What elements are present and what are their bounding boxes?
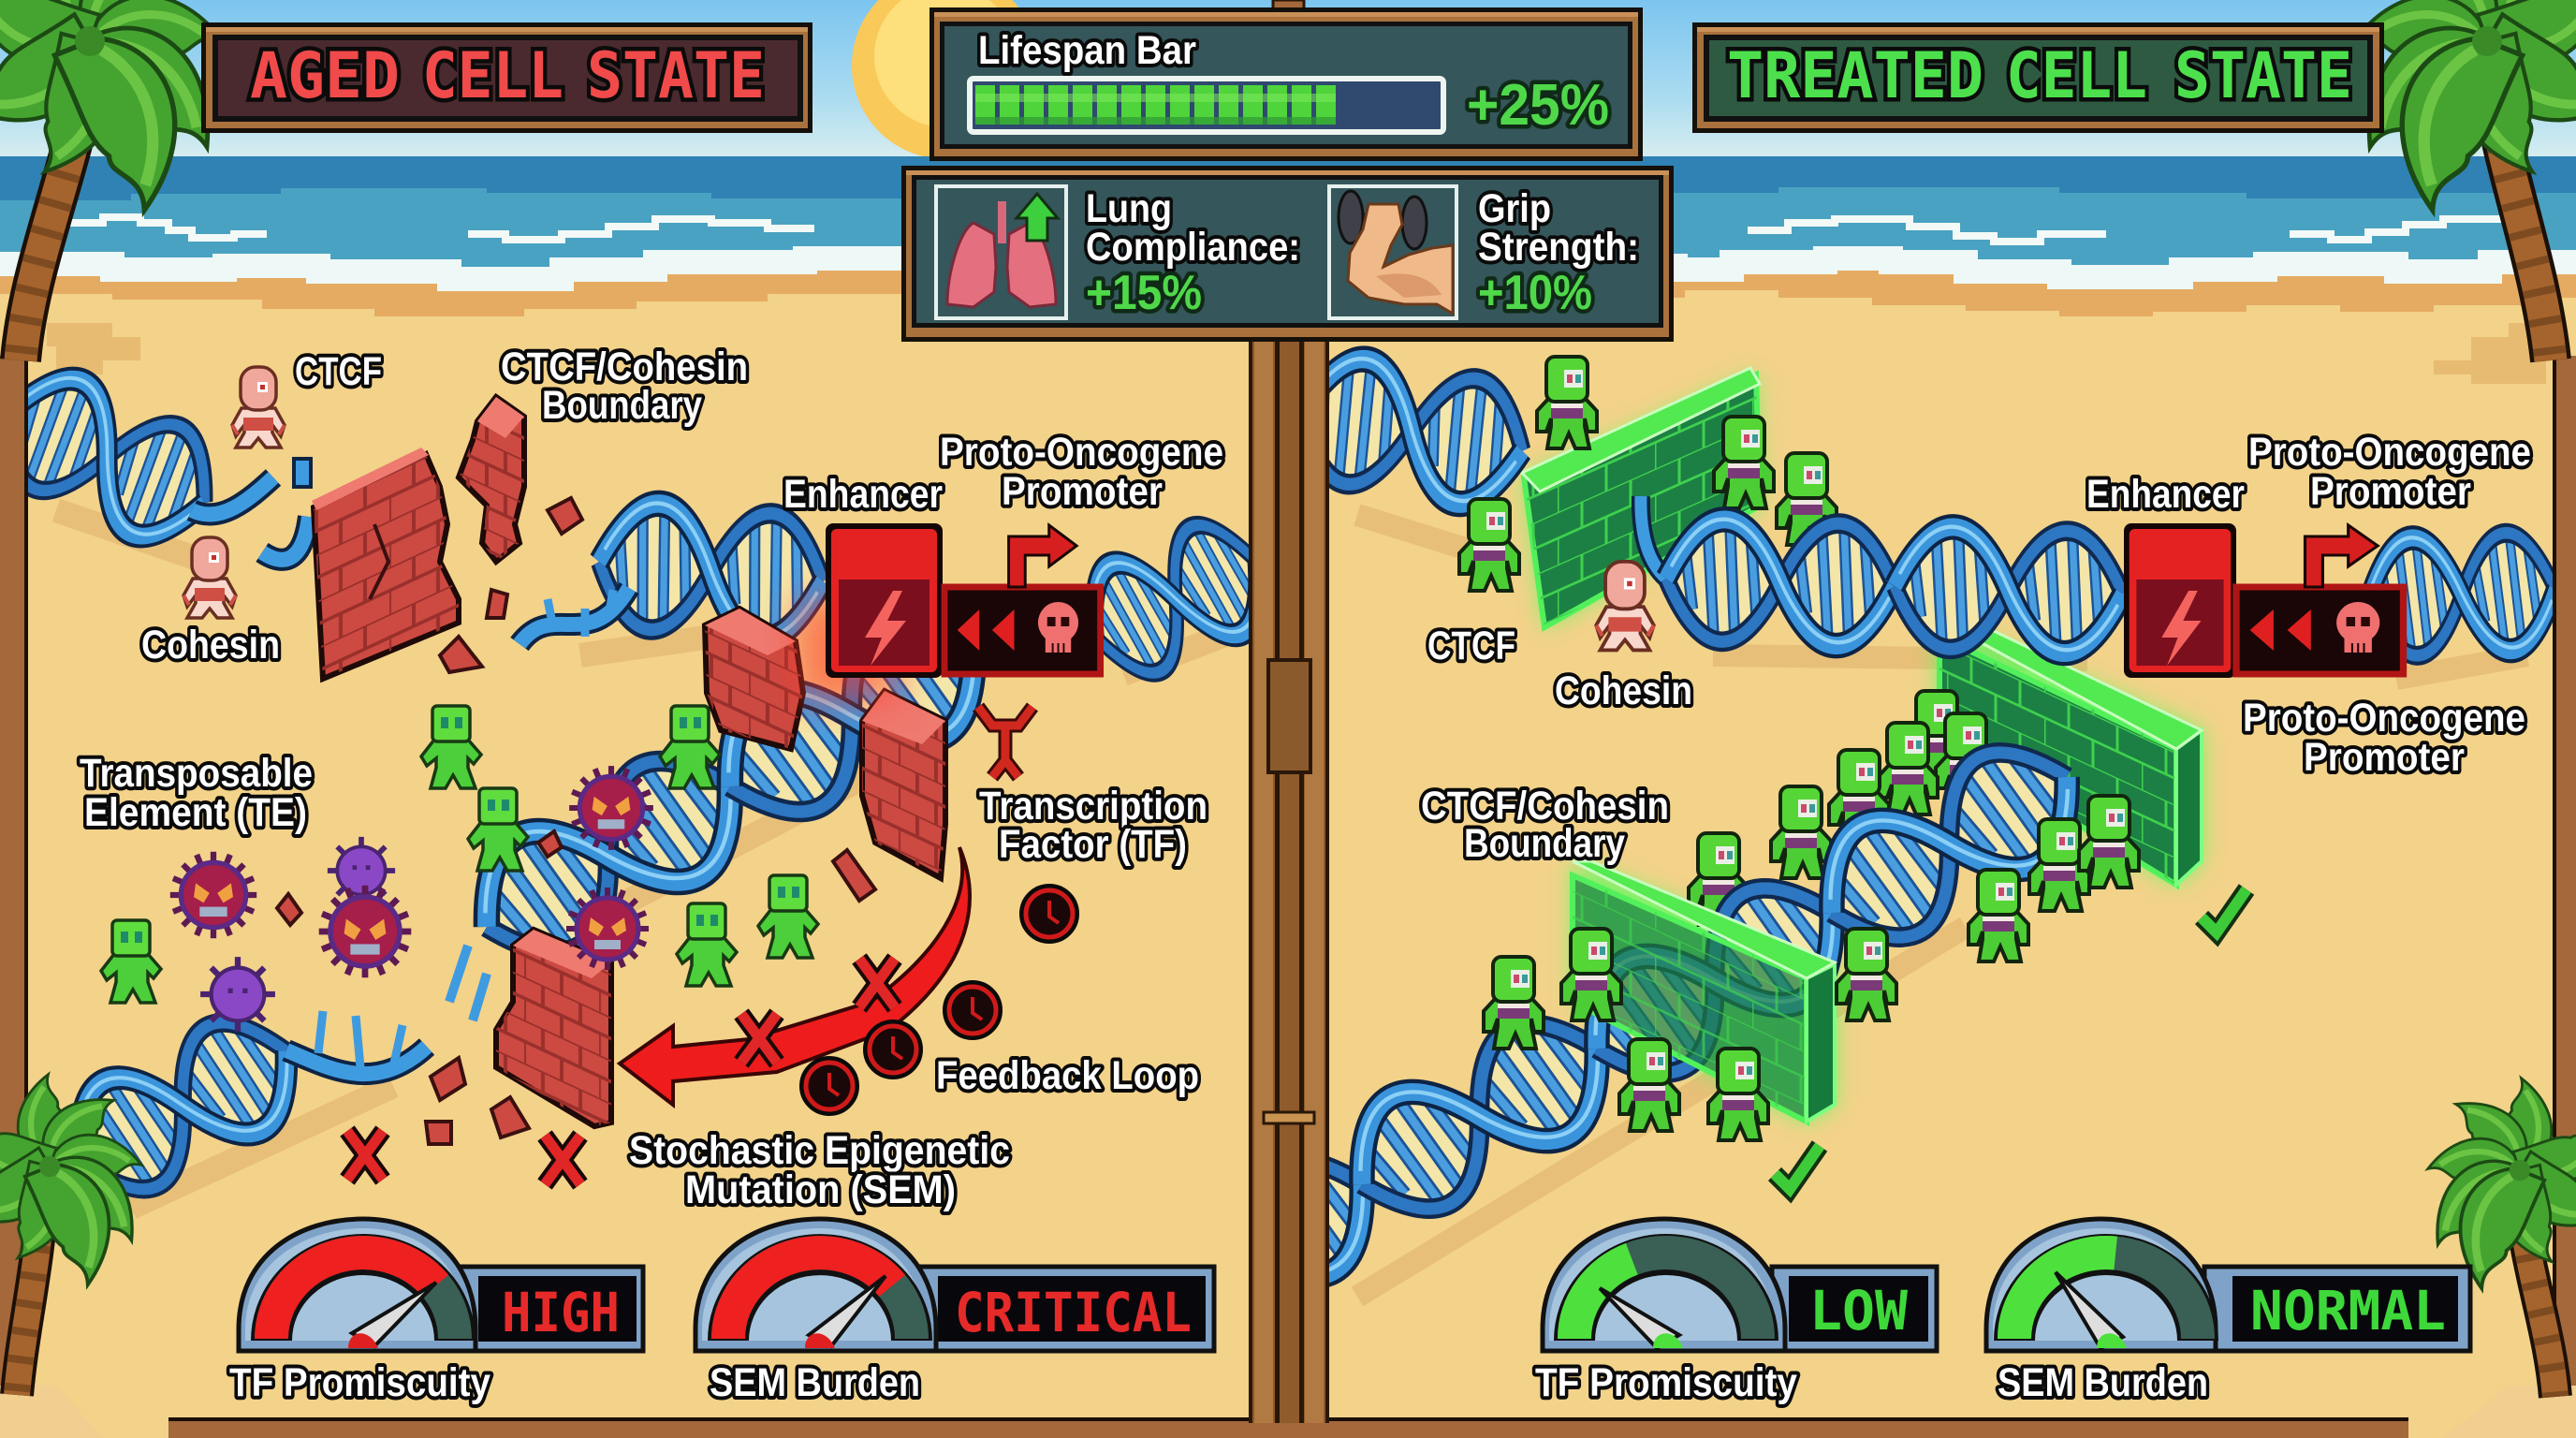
- wall: right green boundary glow: [1936, 618, 2202, 885]
- DNA: lower diagonal strand: [1096, 724, 2098, 1373]
- clock icons: [802, 887, 1076, 1113]
- label: Proto-Oncogene Promoter, lower: [2243, 696, 2525, 780]
- labels: aged scene: [80, 345, 1223, 1405]
- brick debris: [277, 498, 875, 1144]
- wall: lower green boundary, semi-transparent over DNA: [1573, 861, 1835, 1122]
- label: Proto-Oncogene Promoter: [940, 430, 1223, 514]
- free transcription factors: [101, 706, 818, 1003]
- label: CTCF/Cohesin Boundary: Boundary: [1464, 821, 1625, 866]
- text: grip strength: [1478, 186, 1639, 320]
- DNA: right of promoter: [2365, 530, 2558, 658]
- enhancer block: [826, 523, 943, 678]
- text: grip strength: Grip: [1478, 186, 1551, 231]
- gauge: aged TF promiscuity: HIGH: [502, 1281, 620, 1344]
- title board: treated cell state: TREATED: [1727, 39, 1983, 113]
- title board: aged cell state: [201, 22, 812, 133]
- text: grip strength: Strength:: [1478, 225, 1639, 270]
- label: Transcription Factor: [979, 784, 1208, 867]
- wall: lower green boundary glow: [1573, 861, 1835, 1122]
- wall: broken pillar: [459, 397, 524, 562]
- label: Enhancer: Enhancer: [2086, 472, 2245, 517]
- label: Proto-Oncogene Promoter, lower: Promoter: [2304, 735, 2465, 780]
- gauge: treated TF promiscuity: LOW: [1809, 1279, 1908, 1343]
- DNA: upper left broken strand: [0, 359, 311, 560]
- title board: treated cell state: STATE: [2174, 39, 2352, 113]
- title board: treated cell state: [1692, 22, 2384, 133]
- DNA: central strand: [455, 591, 1005, 981]
- label: CTCF/Cohesin Boundary: [501, 345, 748, 428]
- DNA: upper left strand: [1290, 349, 1533, 513]
- label: lifespan bar: Lifespan Bar: [978, 28, 1196, 73]
- Cohesin figure: [1596, 562, 1654, 650]
- palm tree: top right: [2334, 0, 2576, 360]
- enhancer glow: [796, 599, 899, 702]
- wall: right green boundary: [1936, 613, 2202, 885]
- gauge: aged TF promiscuity: [239, 1219, 643, 1351]
- label: Stochastic Epigenetic Mutation: [629, 1128, 1010, 1212]
- sand shadows under DNA: [1357, 515, 2527, 1297]
- green figures behind DNA: [1537, 357, 1996, 925]
- label: Transposable Element: Element (TE): [84, 790, 307, 835]
- icon: flexed arm with dumbbell: [1329, 186, 1456, 318]
- gauge: treated SEM burden: NORMAL: [2250, 1279, 2446, 1343]
- wall: upper green boundary: [1522, 368, 1760, 627]
- panel: lifespan bar: [929, 7, 1643, 161]
- label: CTCF/Cohesin Boundary: CTCF/Cohesin: [1421, 784, 1669, 829]
- value: plus 25 percent: +25%: [1467, 73, 1609, 138]
- label: Cohesin: Cohesin: [1555, 668, 1692, 713]
- icon: sun: [852, 0, 1039, 159]
- label: Proto-Oncogene Promoter: Promoter: [1002, 469, 1163, 514]
- label: Transposable Element: Transposable: [80, 751, 313, 796]
- DNA: right of promoter: [1070, 507, 1281, 690]
- title board: treated cell state: CELL: [2006, 39, 2147, 113]
- Cohesin figure: [183, 537, 236, 618]
- label: TF Promiscuity: TF Promiscuity: [229, 1360, 490, 1405]
- CTCF figure: [232, 367, 285, 448]
- red X marks: [347, 959, 895, 1184]
- DNA: middle left broken strand: [520, 499, 828, 644]
- label: Proto-Oncogene Promoter: Proto-Oncogene: [940, 430, 1223, 475]
- labels: treated scene: [1421, 430, 2531, 1405]
- label: CTCF: CTCF: [295, 349, 382, 394]
- text: lung compliance: Lung: [1086, 186, 1172, 231]
- title board: aged cell state: CELL: [422, 39, 564, 113]
- green figures in front of DNA: [1459, 499, 2139, 1140]
- title board: aged cell state: STATE: [587, 39, 765, 113]
- text: lung compliance: Compliance:: [1086, 225, 1300, 270]
- label: CTCF/Cohesin Boundary: CTCF/Cohesin: [501, 345, 748, 389]
- enhancer block: [2124, 523, 2236, 678]
- gauge: treated TF promiscuity: [1543, 1219, 1937, 1351]
- promoter with silencing arrows: [944, 525, 1101, 674]
- label: TF Promiscuity: TF Promiscuity: [1535, 1360, 1797, 1405]
- wall: lower brick wall: [496, 930, 611, 1126]
- label: Proto-Oncogene Promoter, top: Promoter: [2310, 469, 2471, 514]
- gauge: treated SEM burden: [1986, 1219, 2470, 1351]
- sand shadows under DNA: [56, 510, 1245, 1208]
- label: SEM Burden: SEM Burden: [1998, 1360, 2208, 1405]
- label: Transposable Element: [80, 751, 313, 835]
- promoter with silencing arrows: [2236, 525, 2404, 674]
- TE viruses: [170, 766, 653, 1032]
- wall: broken wall behind DNA: [705, 609, 803, 749]
- label: Enhancer: Enhancer: [783, 472, 943, 517]
- label: Transcription Factor: Transcription: [979, 784, 1208, 829]
- DNA: upper middle strand: [1641, 496, 2125, 655]
- panel: lung and grip stats: [901, 166, 1674, 342]
- gauge: aged SEM burden: CRITICAL: [955, 1281, 1192, 1344]
- background: sky: [0, 0, 2576, 159]
- label: SEM Burden: SEM Burden: [710, 1360, 920, 1405]
- check marks: [1775, 889, 2247, 1189]
- red transcription factor: [978, 707, 1032, 777]
- wall: brick wall near transcription factor: [862, 691, 945, 878]
- label: Transcription Factor: Factor (TF): [999, 822, 1187, 867]
- feedback loop arrow: [620, 847, 970, 1105]
- label: CTCF: CTCF: [1427, 624, 1515, 668]
- palm tree: bottom right: [2412, 1078, 2576, 1438]
- label: CTCF/Cohesin Boundary: Boundary: [542, 383, 702, 428]
- label: Cohesin: Cohesin: [141, 623, 280, 668]
- label: CTCF/Cohesin Boundary: [1421, 784, 1669, 866]
- palm tree: top left: [0, 0, 243, 360]
- text: lung compliance: +15%: [1086, 266, 1202, 320]
- label: Proto-Oncogene Promoter, top: Proto-Oncogene: [2248, 430, 2531, 475]
- wall: upper green boundary glow: [1524, 374, 1760, 627]
- label: Proto-Oncogene Promoter, lower: Proto-Oncogene: [2243, 696, 2525, 741]
- gauge: aged SEM burden: [695, 1219, 1214, 1351]
- background: sea: [0, 156, 2576, 281]
- DNA: lower left strand: [51, 946, 487, 1213]
- text: grip strength: +10%: [1478, 266, 1592, 320]
- progress bar: [970, 79, 1443, 132]
- wall: large cracked brick wall: [312, 448, 459, 679]
- icon: lungs with up arrow: [936, 186, 1066, 318]
- panel: treated scene: [1096, 349, 2558, 1373]
- palm tree: bottom left: [0, 1074, 157, 1438]
- title board: aged cell state: AGED: [250, 39, 400, 113]
- label: Stochastic Epigenetic Mutation: Stochastic Epigenetic: [629, 1128, 1010, 1173]
- panel: aged scene: [0, 359, 1281, 1213]
- label: Proto-Oncogene Promoter, top: [2248, 430, 2531, 514]
- label: Stochastic Epigenetic Mutation: Mutation (SEM): [685, 1167, 956, 1212]
- text: lung compliance: [1086, 186, 1300, 320]
- label: Feedback Loop: Feedback Loop: [936, 1053, 1199, 1098]
